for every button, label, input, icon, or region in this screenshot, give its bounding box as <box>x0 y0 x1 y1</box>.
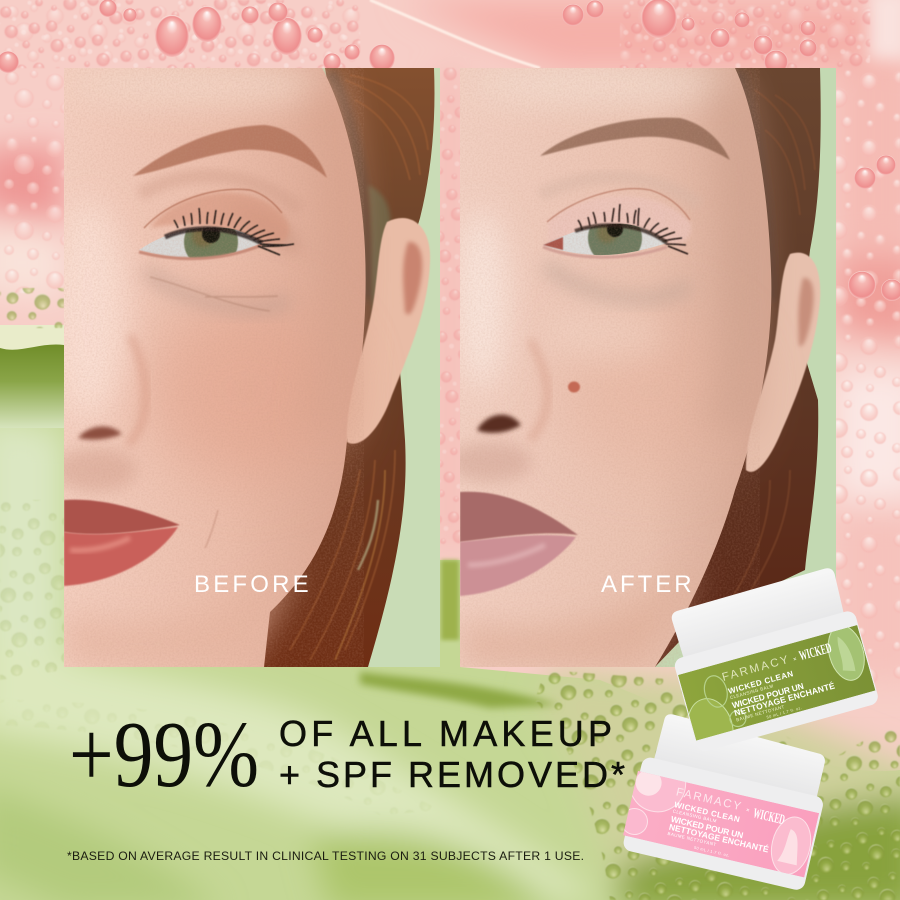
green label: CLEANSING BALM <box>729 683 774 700</box>
green label: 50 mL / 1.7 fl. oz. <box>766 706 803 720</box>
product: green jar <box>672 568 878 740</box>
face <box>460 68 771 667</box>
panel: after photo <box>448 61 836 667</box>
pink label: BAUME NETTOYANT <box>667 831 717 847</box>
hair <box>640 68 821 667</box>
label: before: BEFORE <box>194 571 311 598</box>
headline statistic <box>69 703 625 807</box>
skin grain <box>460 68 760 667</box>
eye <box>543 189 691 265</box>
pink label: NETTOYAGE ENCHANTÉ <box>668 822 770 855</box>
panel: before photo <box>50 61 440 667</box>
mole <box>568 382 580 392</box>
pink label: WICKED <box>752 806 786 828</box>
under-eye crease <box>150 277 278 311</box>
lips <box>460 492 578 596</box>
green label: WICKED CLEAN <box>727 669 794 696</box>
lips <box>64 500 218 586</box>
footnote: *BASED ON AVERAGE RESULT IN CLINICAL TESTING ON 31 SUBJECTS AFTER 1 USE. <box>67 849 584 863</box>
nostril <box>78 426 122 440</box>
face <box>64 68 366 667</box>
green label: WICKED POUR UN <box>731 681 805 710</box>
pink label: WICKED POUR UN <box>670 814 744 840</box>
pink label: 50 mL / 1.7 fl. oz. <box>694 846 730 858</box>
headline line one: OF ALL MAKEUP <box>279 713 612 754</box>
green balm layer <box>0 340 900 900</box>
pink label: CLEANSING BALM <box>672 809 717 824</box>
green label <box>678 625 876 740</box>
dark green fold on left edge <box>0 343 64 428</box>
green label: WICKED <box>798 641 833 664</box>
skin grain <box>64 68 364 667</box>
pink label: FARMACY <box>675 786 742 813</box>
eye <box>139 189 294 269</box>
eyebrow <box>540 118 730 160</box>
green label: NETTOYAGE ENCHANTÉ <box>733 680 836 718</box>
green label: FARMACY <box>721 654 790 684</box>
green label: × <box>793 656 798 663</box>
ear <box>347 218 430 444</box>
large bubbles along the top <box>0 0 900 301</box>
eyebrow <box>133 125 327 178</box>
big number: +99% <box>69 703 259 807</box>
product: pink jar <box>623 714 825 890</box>
pink label <box>623 771 819 878</box>
pink label: × <box>745 808 750 814</box>
skin shading <box>50 61 363 667</box>
nostril <box>477 415 521 433</box>
hair <box>262 68 434 667</box>
label: after: AFTER <box>601 571 694 598</box>
headline line two: + SPF REMOVED* <box>279 754 625 795</box>
skin shading <box>448 61 766 667</box>
ear <box>746 253 820 472</box>
green label: BAUME NETTOYANT <box>736 704 785 722</box>
pink label: WICKED CLEAN <box>673 800 741 824</box>
